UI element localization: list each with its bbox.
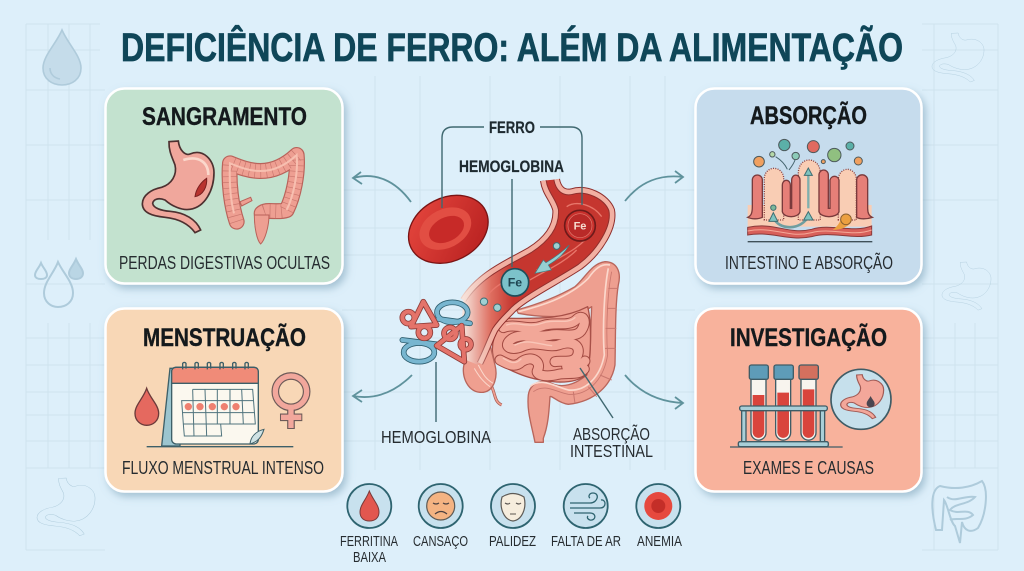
colon [517, 262, 619, 442]
symptom: cansaco: CANSAÇO [413, 533, 468, 550]
leader: absorcao intestinal [580, 368, 613, 418]
panel: menstruacao [106, 308, 342, 492]
symptom: ferritina baixa: BAIXA [353, 549, 386, 566]
cecum and appendix [463, 345, 502, 405]
icon: background intestines bottom right [932, 481, 986, 543]
heading: investigacao: INVESTIGAÇÃO [730, 322, 887, 352]
symptom: palidez [489, 484, 536, 550]
heading: menstruacao: MENSTRUAÇÃO [143, 322, 306, 352]
symptom: anemia: ANEMIA [637, 533, 682, 550]
panel: investigacao [696, 308, 922, 492]
icon: iron particles [480, 210, 595, 311]
symptom: cansaco [413, 484, 468, 550]
symptom: ferritina baixa [340, 484, 398, 566]
leader: hemoglobina bottom [435, 362, 437, 422]
label: hemoglobina top: HEMOGLOBINA [459, 157, 564, 176]
icon: stomach and colon [142, 141, 297, 244]
caption: investigacao: EXAMES E CAUSAS [743, 458, 874, 478]
heading: sangramento: SANGRAMENTO [142, 103, 307, 131]
label: ferro: FERRO [489, 118, 535, 137]
icon: blood drop, calendar and female symbol [135, 362, 307, 447]
caption: sangramento: PERDAS DIGESTIVAS OCULTAS [119, 253, 330, 273]
label: absorcao intestinal: ABSORÇÃO [573, 423, 650, 444]
symptom: falta de ar [551, 484, 621, 550]
arrow: to sangramento [353, 172, 411, 202]
symptom: ferritina baixa: FERRITINA [340, 533, 398, 550]
arrow: to investigacao [625, 375, 683, 409]
symptom: palidez: PALIDEZ [489, 533, 536, 550]
central illustration: stomach, cell and molecule [397, 179, 612, 365]
symptom: anemia [636, 484, 682, 550]
label: absorcao intestinal [570, 423, 653, 461]
label: hemoglobina bottom: HEMOGLOBINA [381, 427, 491, 447]
icon: background drops left [35, 259, 83, 307]
icon: background stomach right [942, 262, 991, 310]
arrow: to menstruacao [353, 375, 412, 402]
icon: background drop top left [43, 30, 81, 85]
leader: hemoglobina top [511, 179, 513, 267]
caption: menstruacao: FLUXO MENSTRUAL INTENSO [122, 458, 324, 478]
icon: iron particles: Fe [508, 276, 522, 290]
red blood cell [397, 182, 500, 276]
arrow: iron flow [535, 245, 569, 273]
symptom: falta de ar: FALTA DE AR [551, 533, 621, 550]
central illustration: intestines [463, 262, 619, 442]
heading: absorcao: ABSORÇÃO [750, 100, 867, 130]
panel: sangramento [106, 88, 342, 284]
stomach [461, 179, 612, 365]
icon: intestinal villi [748, 139, 872, 242]
icon: background stomach bottom left [37, 478, 95, 536]
icon: test tubes and stomach [730, 365, 891, 447]
hemoglobin molecule [402, 302, 471, 362]
icon: background stomach top right [932, 33, 984, 82]
label: absorcao intestinal: INTESTINAL [570, 441, 653, 461]
leader: ferro bracket [442, 127, 582, 208]
caption: absorcao: INTESTINO E ABSORÇÃO [725, 252, 893, 273]
small intestine [492, 307, 591, 382]
panel: absorcao [696, 88, 922, 284]
icon: iron particles: Fe [574, 220, 586, 232]
arrow: to absorcao [625, 171, 683, 201]
